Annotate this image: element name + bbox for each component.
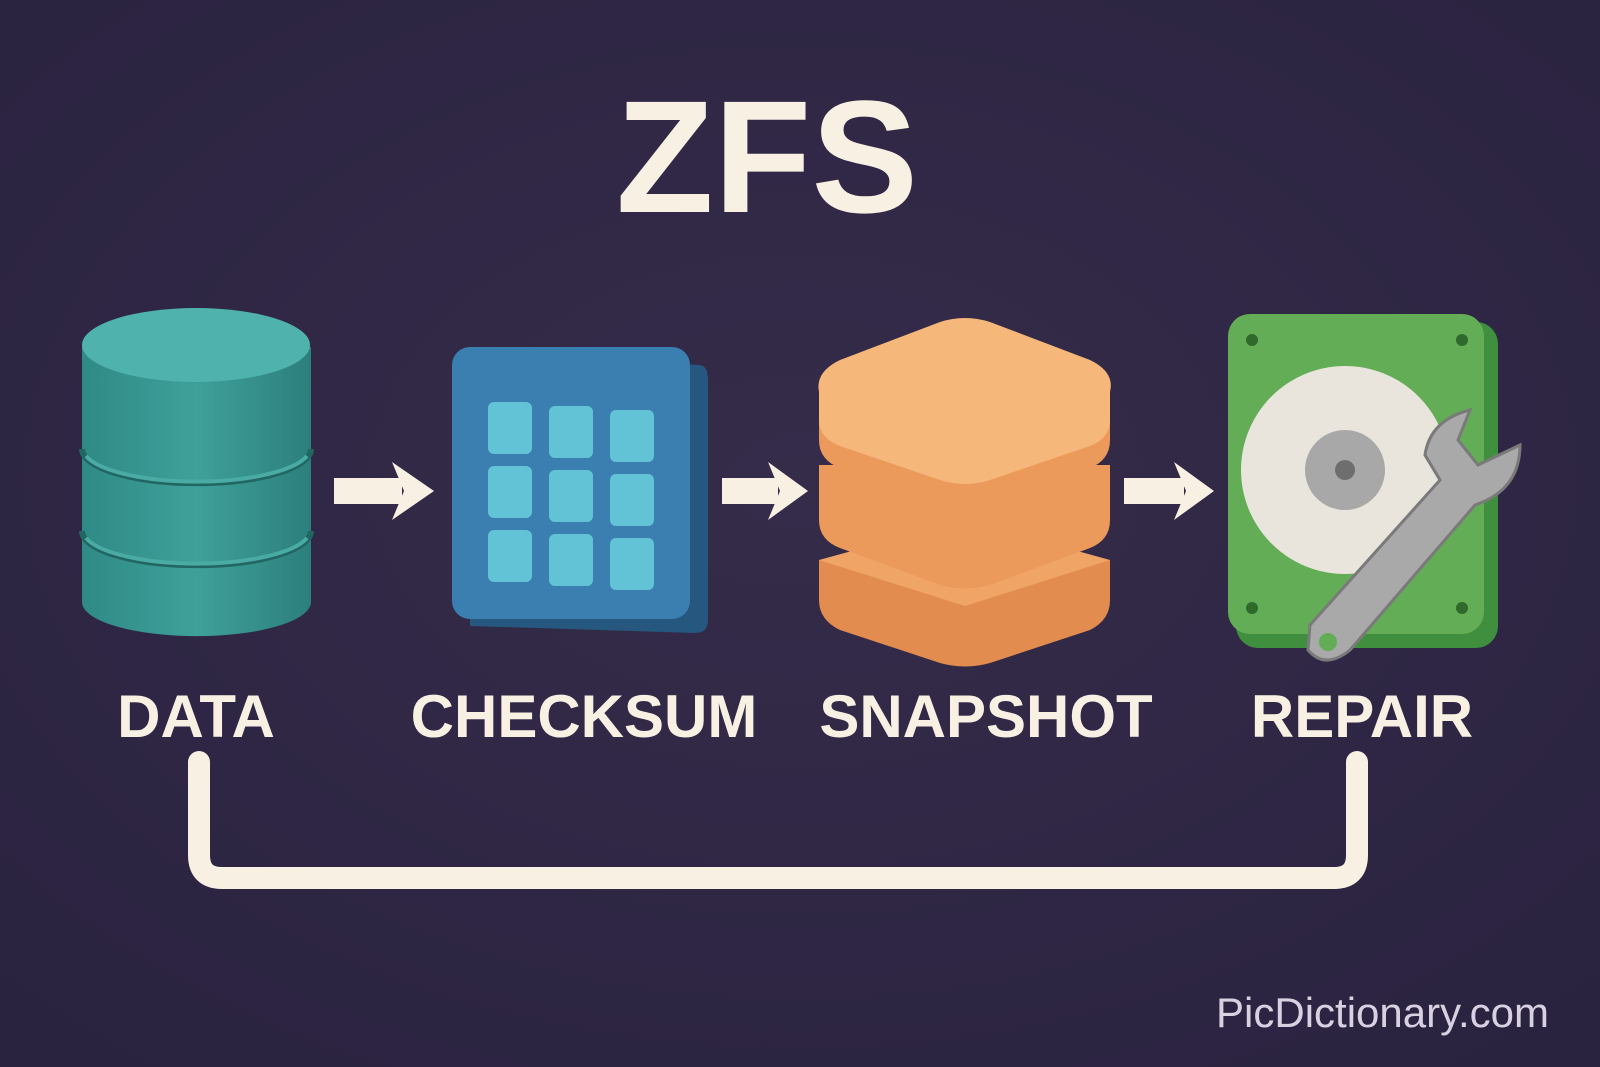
arrow 2	[722, 462, 808, 520]
label: repair: REPAIR	[1251, 683, 1473, 750]
label: checksum: CHECKSUM	[411, 683, 757, 750]
connector bracket	[199, 762, 1357, 878]
title: ZFS	[616, 67, 918, 246]
icon: checksum grid	[452, 347, 708, 633]
arrow 3	[1124, 462, 1214, 520]
watermark: PicDictionary.com	[1216, 989, 1549, 1036]
label: snapshot: SNAPSHOT	[819, 683, 1153, 750]
icon: data cylinder	[82, 308, 311, 636]
arrow 1	[334, 462, 434, 520]
labels	[117, 683, 1473, 750]
icon: repair disk with wrench	[1228, 314, 1520, 660]
icon: snapshot layers	[818, 318, 1111, 666]
label: data: DATA	[117, 683, 275, 750]
